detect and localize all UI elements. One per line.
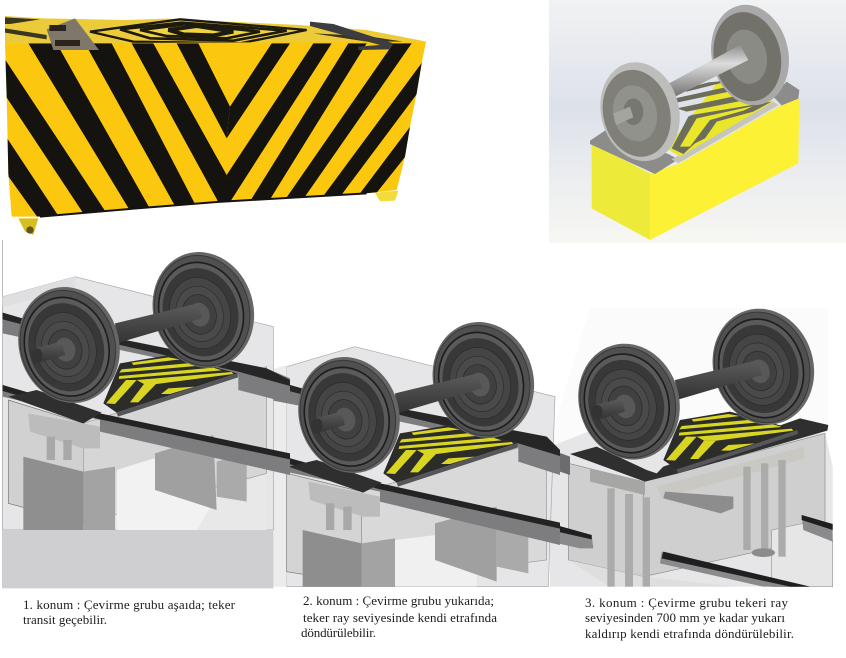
box front face stripes xyxy=(5,42,426,218)
lifting columns xyxy=(607,460,786,587)
panel: position 3 drawing xyxy=(550,296,833,587)
caption: position 1: transit geçebilir. xyxy=(23,612,107,627)
front rail xyxy=(3,385,290,475)
near wheel xyxy=(590,54,690,170)
box top face xyxy=(5,16,427,44)
box feet xyxy=(18,191,398,235)
caption: position 3: seviyesinden 700 mm ye kadar yukarı xyxy=(585,610,785,625)
rear rail xyxy=(270,379,560,475)
caption: position 3: 3. konum : Çevirme grubu tekeri ray xyxy=(585,595,788,610)
wheelset and plate xyxy=(284,309,548,487)
right bracket xyxy=(310,22,393,50)
caption: position 1 xyxy=(23,597,236,627)
housing boxes xyxy=(550,308,833,587)
caption: position 1: 1. konum : Çevirme grubu aşaıda; teker xyxy=(23,597,236,612)
wheelset and plate xyxy=(564,296,828,473)
wheelset and plate xyxy=(4,239,268,417)
render: wheelset on yellow box xyxy=(549,0,846,243)
render background xyxy=(549,0,846,243)
bottom grey block xyxy=(3,530,273,588)
far wheel xyxy=(702,0,798,113)
photo: striped box with chevrons xyxy=(5,16,427,235)
chevron plate xyxy=(667,75,773,157)
caption: position 2: döndürülebilir. xyxy=(301,625,376,640)
panel: position 1 drawing xyxy=(2,239,290,588)
housing boxes xyxy=(270,327,555,587)
lowered rails xyxy=(550,449,833,587)
rear rail xyxy=(3,313,290,403)
yellow pedestal xyxy=(590,82,799,240)
caption: position 2: teker ray seviyesinde kendi etrafında xyxy=(303,610,497,625)
housing boxes xyxy=(2,240,273,588)
caption: position 2 xyxy=(301,593,497,640)
caption: position 3 xyxy=(585,595,794,641)
axle xyxy=(666,45,748,98)
raised deck xyxy=(570,418,828,498)
left bracket xyxy=(47,18,99,50)
front rail xyxy=(270,453,560,545)
caption: position 2: 2. konum : Çevirme grubu yukarıda; xyxy=(303,593,494,608)
caption: position 3: kaldırıp kendi etrafında döndürülebilir. xyxy=(585,626,794,641)
panel: position 2 drawing xyxy=(270,309,560,587)
